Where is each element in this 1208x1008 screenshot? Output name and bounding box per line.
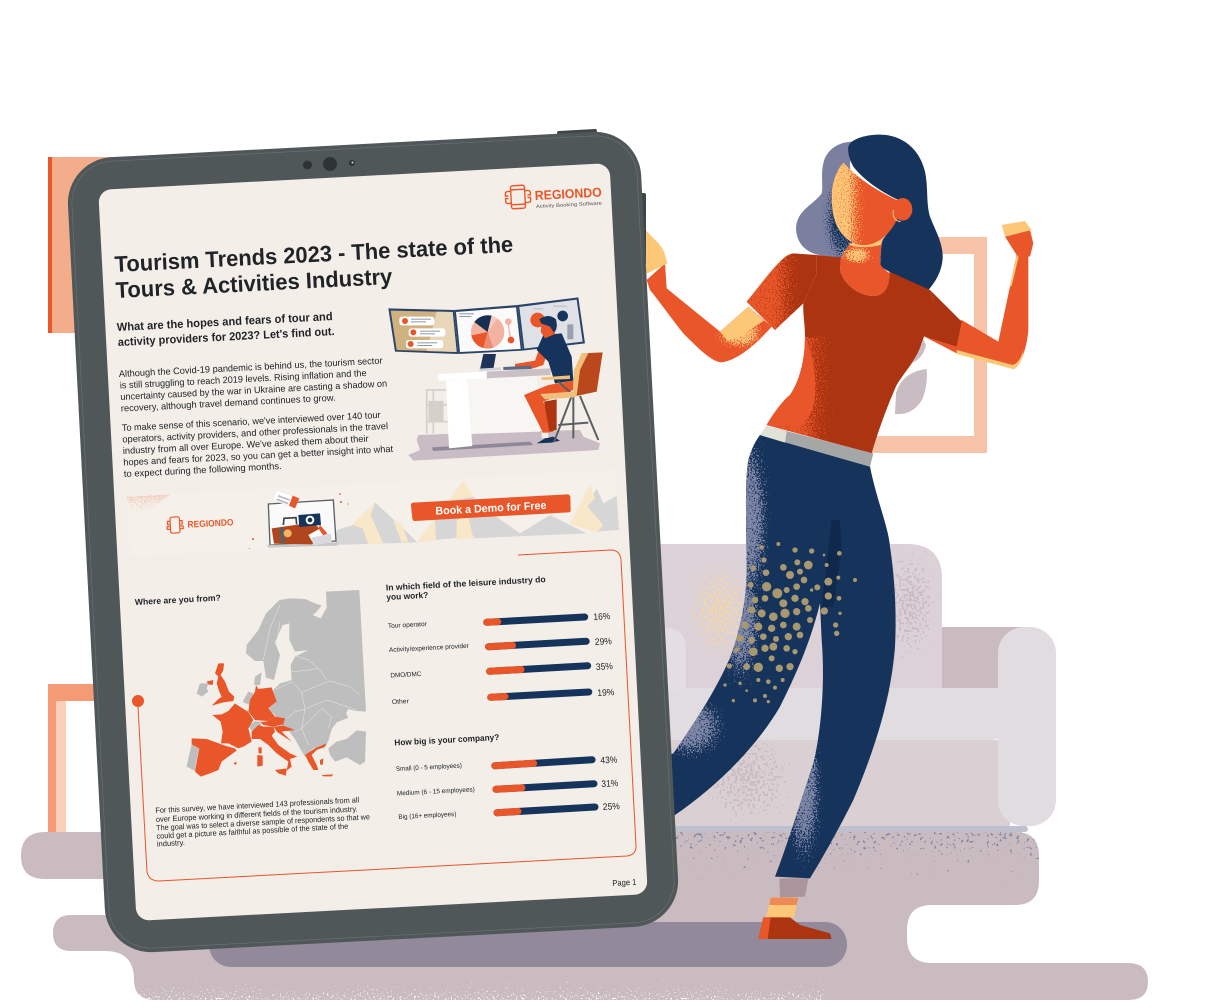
white floor speckle [135,976,824,1000]
belt [760,426,873,467]
survey box dot [132,695,144,707]
second paragraph: industry from all over Europe. We've asked them about their [123,433,369,456]
tablet body [66,130,680,954]
field of industry question [386,574,546,602]
bar: big: 25% [603,801,620,812]
left hand [644,228,667,274]
shirt [767,255,933,453]
bar: activity provider: Activity/experience provider [389,643,470,654]
field bar chart [388,611,615,706]
monitor stand [479,354,501,371]
desk illustration [388,297,603,461]
tablet device [66,129,680,954]
left arm [647,263,772,362]
subheading [117,311,335,349]
neck [840,240,889,296]
second paragraph: To make sense of this scenario, we've interviewed over 140 tour [122,409,381,433]
hair front [848,135,943,292]
bar: tour operator: 16% [593,611,611,622]
peach picture frame behind woman [860,237,987,453]
logo wordmark: REGIONDO [534,185,602,203]
europe map [187,590,366,777]
participating countries [192,663,333,777]
orange back panel top-left [48,157,138,333]
banner spray [127,494,170,525]
subheading: What are the hopes and fears of tour and [117,311,333,334]
sofa speckles [673,527,950,847]
desk floor [408,430,600,461]
field of industry question: you work? [386,590,429,602]
bar: small: Small (0 - 5 employees) [396,763,462,773]
survey box outline [138,550,636,881]
bar: activity provider [389,636,612,654]
face [832,163,901,245]
banner logo: REGIONDO [187,517,234,530]
leaf behind waist [895,339,927,414]
field of industry question: In which field of the leisure industry do [386,574,546,592]
tablet cameras [303,157,355,171]
company size bar chart [396,755,620,821]
bar: big: Big (16+ employees) [398,811,457,821]
bar: medium [397,778,619,797]
bar: big [398,801,620,821]
hair back [796,142,853,258]
second paragraph [122,409,394,479]
intro paragraph: is still struggling to reach 2019 levels. Rising inflation and the [120,367,367,390]
person at desk [503,316,573,443]
where are you from heading: Where are you from? [135,593,221,607]
banner background [127,470,619,557]
title [114,232,514,303]
logo icon [505,185,531,209]
survey description: The goal was to select a diverse sample of respondents so that we [156,812,370,832]
map borders [263,605,360,745]
bar: small [396,755,618,773]
survey description: For this survey, we have interviewed 143 professionals from all [155,795,360,815]
logo top [505,185,602,210]
survey description: could get a picture as faithful as possible of the state of the [156,822,348,841]
ear [893,198,912,222]
blue floor speckle [676,832,1039,884]
woman figure [633,135,1033,939]
bar: DMO: 35% [596,661,613,672]
intro paragraph [119,355,387,413]
book a demo button [411,494,571,521]
centre monitor with pie chart [454,305,523,354]
tan paint blobs [723,542,857,703]
bar: small: 43% [600,755,618,765]
second paragraph: hopes and fears for 2023, so you can get a better insight into what [123,443,394,467]
page number: Page 1 [612,877,637,888]
shelves [427,387,535,433]
bar: DMO: DMO/DMC [390,671,422,679]
bar: other [392,687,615,706]
bar: tour operator: Tour operator [388,621,428,630]
right arm [923,255,1028,368]
subheading: activity providers for 2023? Let's find out. [118,326,335,349]
bar: medium: 31% [601,778,619,789]
tablet screen [98,163,648,921]
survey description [155,795,370,848]
promo banner [127,470,619,557]
orange frame bottom-left [48,684,108,832]
logo tagline: Activity Booking Software [536,201,602,210]
desk [467,376,540,434]
survey description: over Europe working in different fields of the tourism industry. [156,804,358,824]
second paragraph: operators, activity providers, and other professionals in the travel [122,420,388,444]
shoe and ankle [758,878,832,939]
floor shadow [209,922,847,967]
book a demo button: Book a Demo for Free [435,500,547,518]
tablet buttons [557,129,646,265]
bar: DMO [390,661,613,679]
right sleeve [923,290,962,347]
chair [540,352,603,442]
bar: other: 19% [597,687,615,698]
left sleeve [747,253,817,330]
country borders on orange [222,703,277,748]
floor shape [21,832,1148,1000]
mountains [335,481,619,545]
intro paragraph: Although the Covid-19 pandemic is behind us, the tourism sector [119,355,383,379]
bar: other: Other [392,698,410,706]
banner logo [167,517,234,533]
bar: tour operator [388,611,611,630]
left monitor [388,308,458,354]
fist [1005,230,1033,257]
bar: medium: Medium (6 - 15 employees) [397,786,475,797]
non-participating countries [187,590,366,771]
intro paragraph: uncertainty caused by the war in Ukraine are casting a shadow on [120,378,387,402]
company size question: How big is your company? [394,732,499,747]
intro paragraph: recovery, although travel demand continues to grow. [121,392,336,413]
laptop with suitcase [249,490,349,549]
sofa [650,544,1056,832]
bar: activity provider: 29% [595,636,612,647]
title: Tourism Trends 2023 - The state of the [114,232,514,277]
title: Tours & Activities Industry [115,264,393,303]
second paragraph: to expect during the following months. [124,460,282,479]
trousers [672,435,896,878]
upper body [644,135,1033,467]
survey description: industry. [157,838,185,848]
right monitor [517,297,585,351]
